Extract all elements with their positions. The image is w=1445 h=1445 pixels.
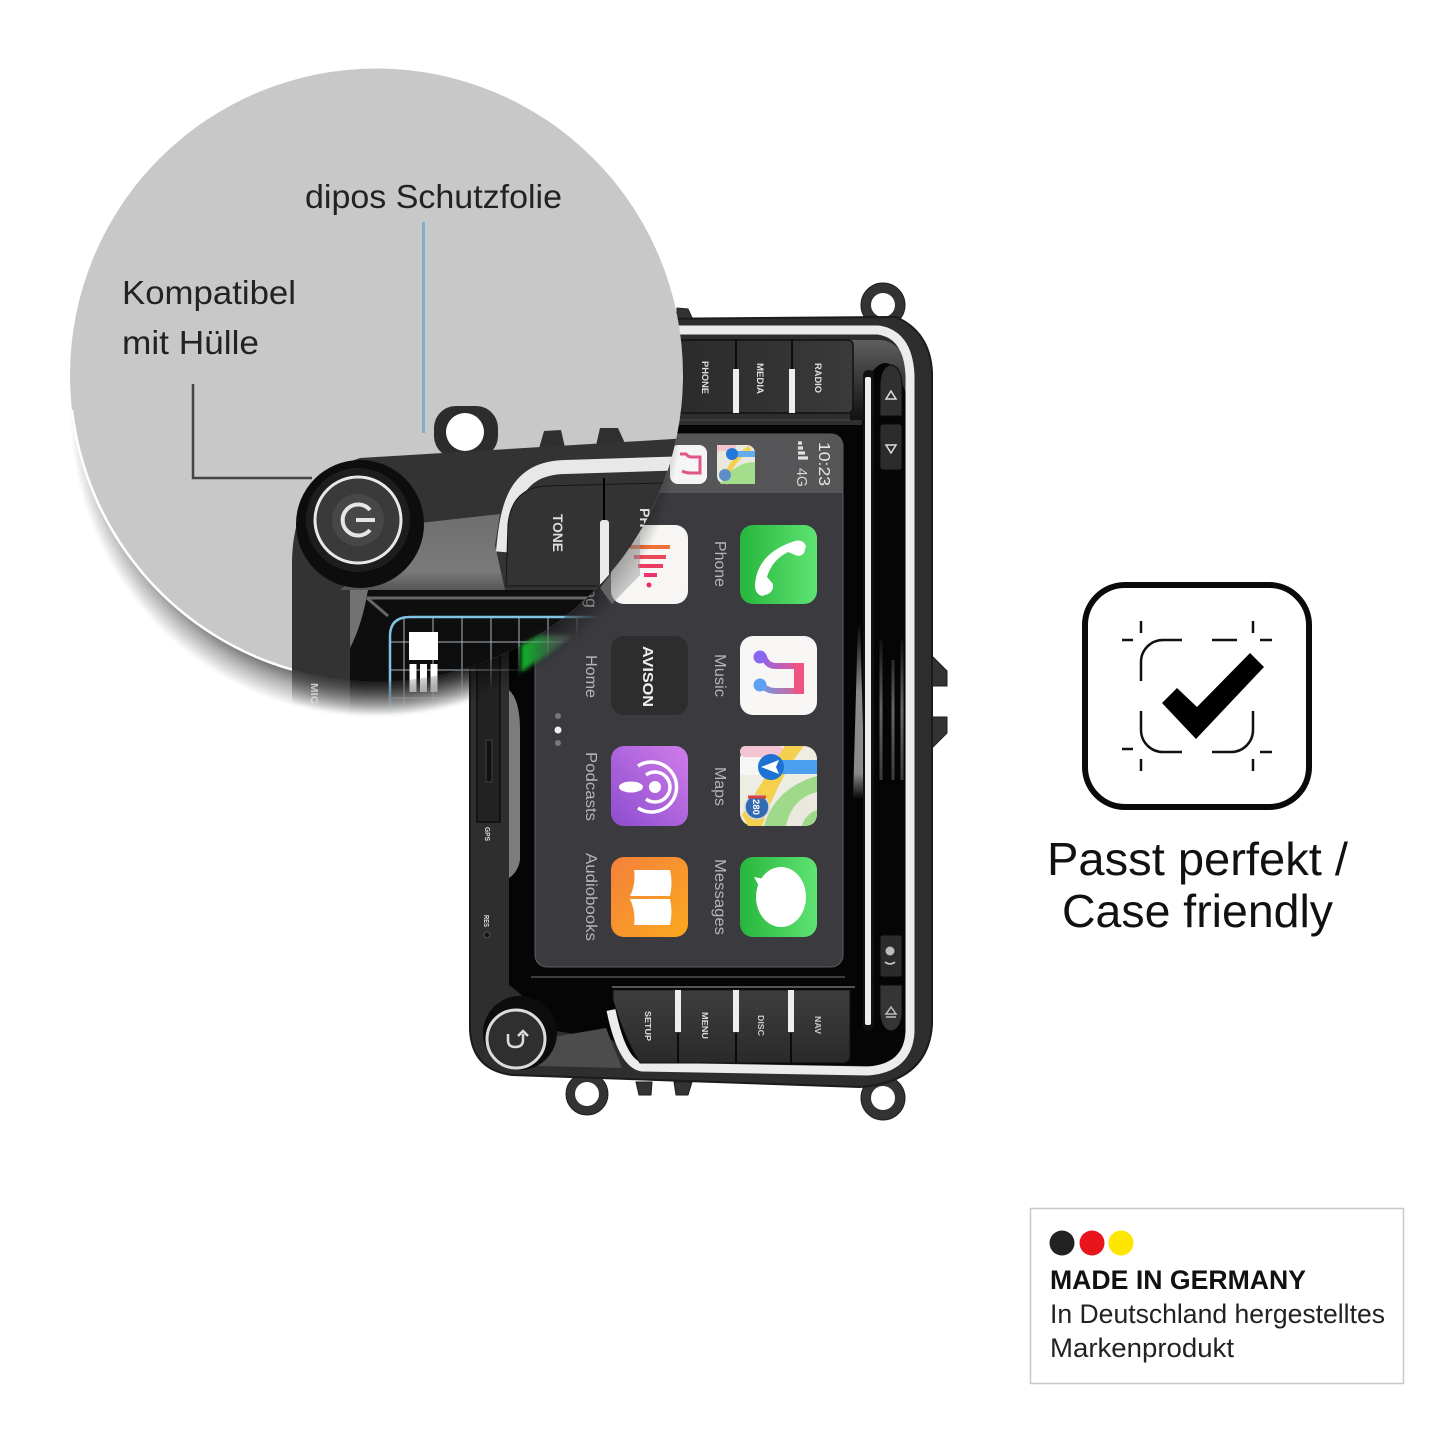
badge heading: MADE IN GERMANY xyxy=(1050,1265,1306,1295)
status bar xyxy=(535,434,843,493)
side button eject xyxy=(880,985,902,1031)
label PHONE: PHONE xyxy=(700,361,710,394)
label NAV: NAV xyxy=(813,1016,823,1034)
badge: made in Germany xyxy=(1030,1208,1404,1384)
side button up xyxy=(880,365,902,416)
lug holes xyxy=(575,293,895,1110)
caption: Passt perfekt / Case friendly: Passt perfekt / xyxy=(1047,833,1348,885)
top button separators xyxy=(736,340,792,369)
icon: perfect fit check xyxy=(1085,585,1309,807)
caption: Passt perfekt / Case friendly: Case friendly xyxy=(1062,885,1333,937)
bottom buttons xyxy=(612,987,855,1063)
label Maps: Maps xyxy=(711,767,728,806)
label Audiobooks: Audiobooks xyxy=(582,853,599,941)
callout: Kompatibel mit Hülle: mit Hülle xyxy=(122,324,259,361)
badge text line 1: In Deutschland hergestelltes xyxy=(1050,1299,1385,1329)
label MENU: MENU xyxy=(700,1012,710,1039)
SD slot recess xyxy=(486,740,492,782)
magnified button block xyxy=(506,482,664,586)
app: maps: 280 xyxy=(751,799,761,815)
label MEDIA: MEDIA xyxy=(755,363,765,395)
magnified power knob xyxy=(296,460,424,588)
app: audiobooks xyxy=(611,857,688,937)
label GPS: GPS xyxy=(483,827,490,841)
black inner frame xyxy=(509,360,908,1066)
caption: Passt perfekt / Case friendly xyxy=(1047,833,1348,937)
app: Avison home xyxy=(611,636,688,715)
frame highlight lines xyxy=(531,420,850,977)
app: messages xyxy=(740,857,817,937)
SD card slot xyxy=(477,650,500,822)
magnified chrome rail xyxy=(503,463,690,552)
top buttons xyxy=(670,340,853,413)
app: music xyxy=(740,636,817,715)
label SETUP: SETUP xyxy=(643,1011,653,1041)
leader line: Kompatibel xyxy=(193,384,312,478)
knob outer xyxy=(483,996,557,1070)
green screen glow xyxy=(521,635,572,672)
status clock: 10:23 xyxy=(815,442,832,486)
disc slot line xyxy=(863,370,874,1030)
callout: Kompatibel mit Hülle: Kompatibel xyxy=(122,274,296,311)
badge text line 2: Markenprodukt xyxy=(1050,1333,1235,1363)
film icon square xyxy=(409,632,438,660)
icon frame xyxy=(1085,585,1309,807)
magnified left wedge highlight xyxy=(350,590,368,648)
magnified separator xyxy=(603,478,605,520)
icon brightness xyxy=(885,946,895,964)
protective film overlay xyxy=(388,616,597,711)
status network: 4G xyxy=(793,468,810,487)
label DISC: DISC xyxy=(756,1015,766,1036)
flag dots xyxy=(1050,1230,1134,1256)
icon: power symbol xyxy=(343,504,375,536)
magnified tabs xyxy=(539,430,564,448)
status maps icon xyxy=(717,445,755,484)
device body xyxy=(470,317,932,1087)
label Podcasts: Podcasts xyxy=(582,752,599,821)
bottom separators xyxy=(678,1033,791,1063)
status signal bars xyxy=(798,443,808,458)
status music icon xyxy=(670,445,707,484)
left panel highlight xyxy=(509,690,520,878)
callout: Kompatibel mit Hülle xyxy=(122,274,296,361)
film grid lines xyxy=(391,616,578,705)
lens drop shadow xyxy=(70,106,682,718)
glare on music tile xyxy=(600,535,640,604)
icon eject xyxy=(886,1007,896,1017)
app: music player tile xyxy=(611,525,688,604)
magnified mounting lug xyxy=(434,406,498,458)
label Home: Home xyxy=(582,655,599,698)
magnified reflection xyxy=(340,514,505,590)
lower reflection xyxy=(538,1028,622,1068)
side button brightness xyxy=(880,935,902,977)
top button block xyxy=(670,340,853,413)
magnifier lens circle xyxy=(70,68,683,682)
label Messages: Messages xyxy=(711,859,728,935)
magnified device corner xyxy=(292,406,676,714)
icon down triangle xyxy=(886,445,896,453)
magnified label TONE: TONE xyxy=(550,514,565,552)
lens white rim xyxy=(72,410,292,670)
chrome rail xyxy=(611,330,910,1071)
label RES: RES xyxy=(482,915,489,927)
lower knob xyxy=(483,996,557,1070)
leader line: Schutzfolie xyxy=(422,222,425,433)
touch screen xyxy=(535,434,843,967)
bar above bottom buttons xyxy=(612,986,855,988)
car radio device xyxy=(470,283,947,1120)
blue film outline xyxy=(388,616,597,711)
bottom button block xyxy=(613,990,850,1063)
callout: dipos Schutzfolie: dipos Schutzfolie xyxy=(305,178,562,215)
side button down xyxy=(880,424,902,470)
app: maps xyxy=(740,746,817,826)
badge frame xyxy=(1030,1208,1404,1384)
magnified black screen frame xyxy=(350,590,594,706)
app: podcasts xyxy=(611,746,688,826)
magnified mic label: MIC xyxy=(308,683,319,704)
page dots xyxy=(554,713,562,746)
app: phone xyxy=(740,525,817,604)
disc slot white xyxy=(865,377,871,1025)
right streak highlight xyxy=(853,620,865,800)
icon checkmark xyxy=(1162,653,1264,739)
device mounting lugs and tabs xyxy=(566,283,947,1120)
label RADIO: RADIO xyxy=(813,363,823,393)
magnified frame line xyxy=(367,598,600,616)
back arrow icon xyxy=(508,1031,528,1047)
magnified label PHONE: PHONE xyxy=(637,508,652,558)
upper right grey corner xyxy=(850,340,909,420)
label Phone: Phone xyxy=(711,541,728,587)
knob face xyxy=(487,1010,545,1068)
disc slot grooves xyxy=(881,640,902,780)
reset hole xyxy=(484,932,490,938)
partial label under lens: ng xyxy=(582,588,599,608)
icon up triangle xyxy=(886,391,896,399)
screen panel xyxy=(535,434,843,967)
magnified body xyxy=(292,438,690,730)
label Music: Music xyxy=(711,654,728,697)
app: Avison home: AVISON xyxy=(639,646,656,707)
icon crop corners xyxy=(1122,621,1272,771)
film icon bars xyxy=(413,664,434,692)
